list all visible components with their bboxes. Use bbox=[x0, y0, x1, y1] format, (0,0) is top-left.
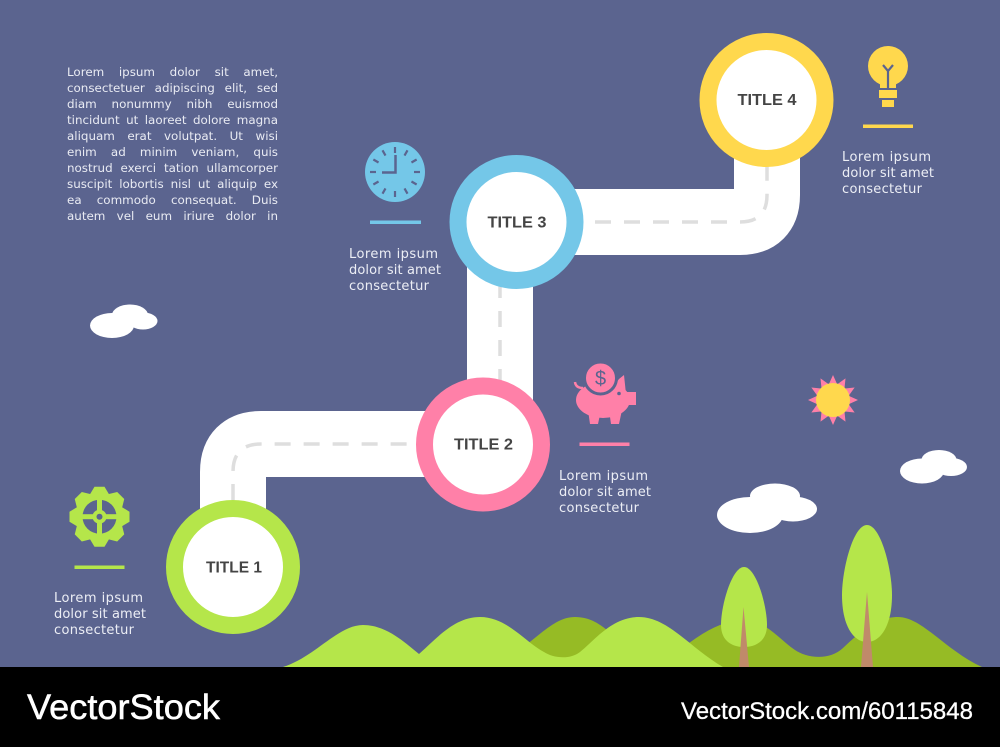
caption 1: consectetur bbox=[54, 623, 135, 638]
intro text block: consectetuer adipiscing elit, sed bbox=[67, 81, 278, 95]
icon: piggy bank: $ bbox=[595, 368, 606, 390]
intro text block: diam nonummy nibh euismod bbox=[67, 97, 278, 111]
road bbox=[233, 100, 767, 567]
caption 1: dolor sit amet bbox=[54, 607, 146, 622]
cloud: left bbox=[90, 304, 158, 338]
milestone 2: TITLE 2 bbox=[454, 436, 513, 454]
icon: piggy bank bbox=[575, 362, 636, 424]
intro text block: tincidunt ut laoreet dolore magna bbox=[67, 113, 278, 127]
divider: green bbox=[74, 566, 124, 569]
cloud: right bbox=[900, 450, 967, 484]
intro text block bbox=[67, 65, 278, 223]
hills: light foreground bbox=[283, 617, 723, 667]
road lane dashes bbox=[233, 444, 420, 500]
intro text block: suscipit lobortis nisl ut aliquip ex bbox=[67, 177, 278, 191]
tree: small bbox=[721, 567, 767, 667]
caption 3: consectetur bbox=[349, 279, 430, 294]
divider: blue bbox=[370, 220, 421, 224]
divider: pink bbox=[580, 442, 630, 446]
caption 2 bbox=[559, 469, 651, 516]
hills: dark background bbox=[520, 617, 982, 667]
caption 4: consectetur bbox=[842, 182, 923, 197]
milestone 3: TITLE 3 bbox=[488, 214, 547, 232]
caption 1 bbox=[54, 591, 146, 638]
cloud: middle bbox=[717, 484, 817, 533]
intro text block: enim ad minim veniam, quis bbox=[67, 145, 278, 159]
milestone 3 bbox=[458, 164, 575, 280]
caption 3 bbox=[349, 247, 441, 294]
clouds bbox=[90, 304, 967, 533]
caption 1: Lorem ipsum bbox=[54, 591, 143, 606]
milestone 4: TITLE 4 bbox=[738, 92, 797, 109]
icon: clock bbox=[365, 142, 425, 202]
intro text block: nostrud exerci tation ullamcorper bbox=[67, 161, 278, 175]
caption 2: dolor sit amet bbox=[559, 485, 651, 500]
intro text block: ea commodo consequat. Duis bbox=[67, 193, 278, 207]
footer bar bbox=[0, 667, 1000, 747]
caption 2: consectetur bbox=[559, 501, 640, 516]
intro text block: Lorem ipsum dolor sit amet, bbox=[67, 65, 278, 79]
caption 4 bbox=[842, 150, 934, 197]
caption 2: Lorem ipsum bbox=[559, 469, 648, 484]
footer bar: VectorStock.com/60115848 bbox=[681, 698, 973, 725]
milestone 4 bbox=[708, 42, 825, 158]
footer bar: VectorStock bbox=[27, 688, 221, 727]
milestone 2 bbox=[424, 386, 542, 503]
tree: tall bbox=[842, 525, 892, 667]
intro text block: aliquam erat volutpat. Ut wisi bbox=[67, 129, 278, 143]
icon: sun bbox=[808, 375, 858, 425]
milestone 1 bbox=[174, 508, 292, 626]
road surface bbox=[233, 100, 767, 567]
icon: gear bbox=[70, 487, 130, 547]
intro text block: autem vel eum iriure dolor in bbox=[67, 209, 278, 223]
milestone 1: TITLE 1 bbox=[206, 560, 262, 576]
caption 3: dolor sit amet bbox=[349, 263, 441, 278]
caption 3: Lorem ipsum bbox=[349, 247, 438, 262]
caption 4: Lorem ipsum bbox=[842, 150, 931, 165]
divider: yellow bbox=[863, 124, 913, 128]
icon: light bulb bbox=[868, 46, 908, 107]
caption 4: dolor sit amet bbox=[842, 166, 934, 181]
